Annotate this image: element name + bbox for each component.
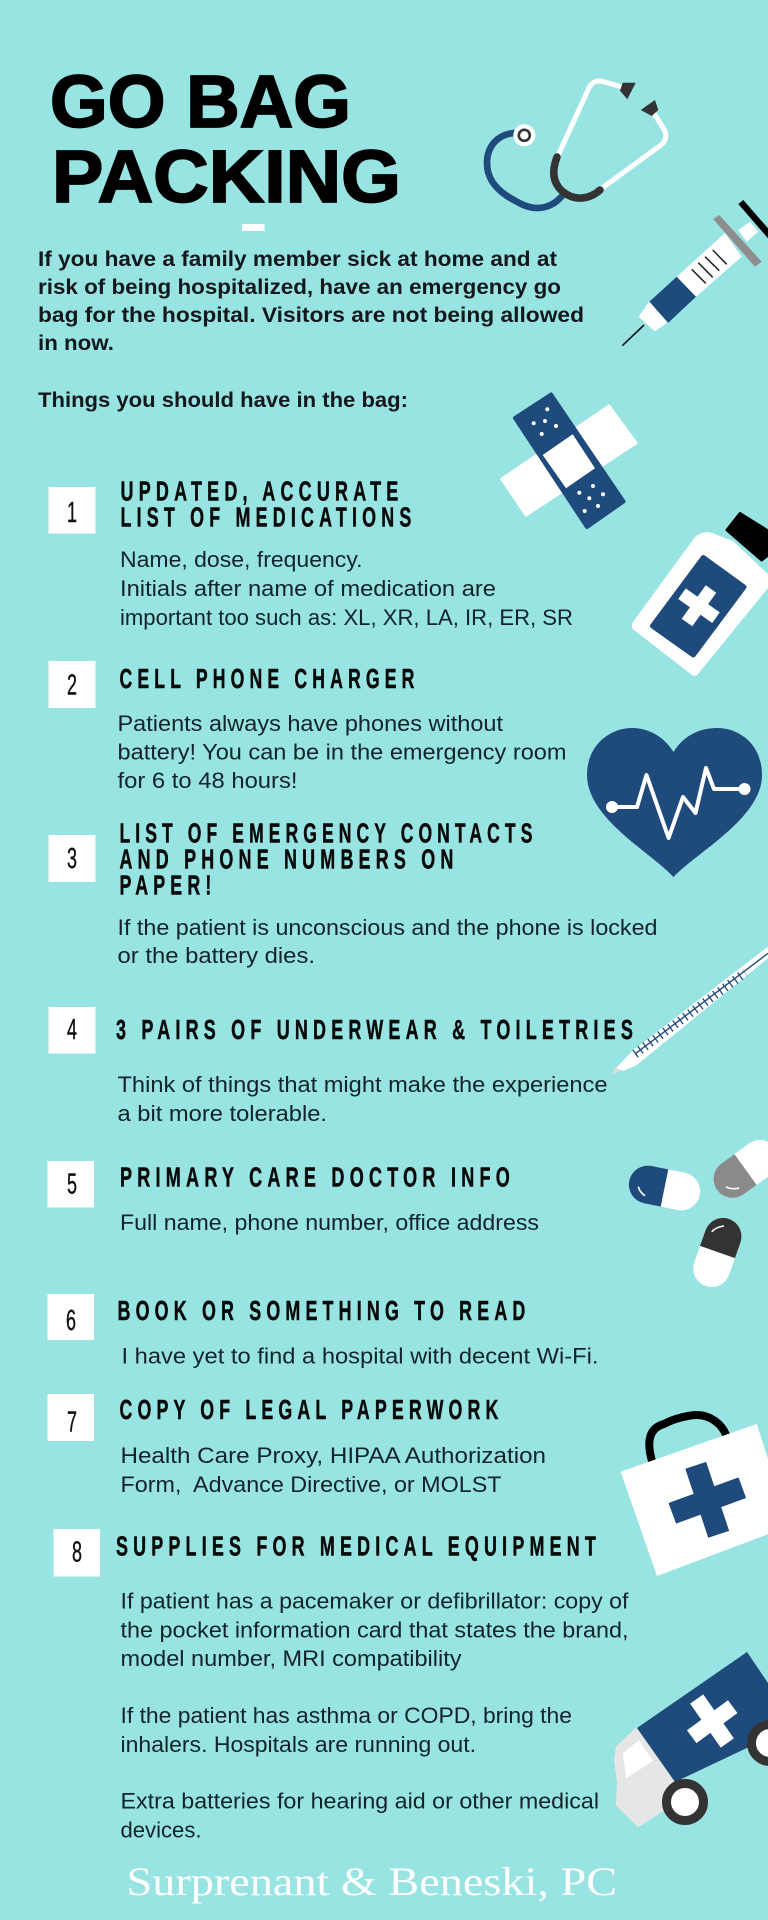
item 3 — [48, 818, 658, 968]
body 3: or the battery dies. — [118, 943, 315, 968]
item 8 — [54, 1529, 629, 1842]
icon: thermometer — [613, 947, 768, 1075]
number box 8: 8 — [72, 1536, 82, 1568]
number box 7: 7 — [67, 1406, 77, 1438]
body 8: the pocket information card that states the brand, — [120, 1618, 628, 1642]
body 8: devices. — [120, 1818, 202, 1842]
number box 4 — [48, 1007, 96, 1054]
heading 3: AND PHONE NUMBERS ON — [120, 844, 458, 874]
icon: medicine bottle — [632, 514, 768, 676]
body 4: Think of things that might make the experience — [118, 1072, 608, 1097]
intro text: If you have a family member sick at home and at — [38, 247, 557, 271]
intro text: bag for the hospital. Visitors are not being allowed — [38, 303, 584, 327]
divider dash — [242, 224, 264, 231]
body 1: Initials after name of medication are — [120, 576, 496, 601]
heading 1 — [120, 476, 416, 533]
icon: ambulance — [615, 1652, 768, 1826]
body 5: Full name, phone number, office address — [120, 1210, 539, 1235]
body 4 — [118, 1072, 608, 1126]
icon: pill dark — [688, 1213, 747, 1292]
body 8: If patient has a pacemaker or defibrillator: copy of — [120, 1588, 629, 1614]
body 6: I have yet to find a hospital with decent Wi-Fi. — [122, 1344, 598, 1368]
number box 3 — [48, 835, 96, 882]
heading 5: PRIMARY CARE DOCTOR INFO — [120, 1162, 515, 1192]
body 7 — [120, 1443, 546, 1497]
title: GO BAG — [50, 60, 351, 143]
body 8: If the patient has asthma or COPD, bring the — [120, 1703, 572, 1728]
body 3: If the patient is unconscious and the phone is locked — [118, 915, 658, 940]
title — [50, 60, 401, 218]
item 7 — [48, 1394, 546, 1497]
footer firm name: Surprenant & Beneski, PC — [126, 1859, 617, 1904]
intro text: risk of being hospitalized, have an emergency go — [38, 275, 561, 299]
body 8: inhalers. Hospitals are running out. — [120, 1732, 476, 1757]
icon: syringe — [622, 200, 768, 346]
icon: heart with pulse — [587, 728, 762, 877]
intro text: Things you should have in the bag: — [38, 388, 408, 412]
icon: pill blue — [625, 1162, 704, 1214]
body 7: Health Care Proxy, HIPAA Authorization — [120, 1443, 546, 1468]
body 7: Form, Advance Directive, or MOLST — [120, 1472, 502, 1497]
body 2: Patients always have phones without — [118, 711, 503, 736]
number box 3: 3 — [67, 843, 77, 875]
body 8 — [120, 1588, 629, 1842]
number box 5: 5 — [67, 1168, 77, 1200]
heading 6: BOOK OR SOMETHING TO READ — [118, 1295, 530, 1326]
body 1: important too such as: XL, XR, LA, IR, ER, SR — [120, 605, 573, 630]
item 5 — [48, 1161, 539, 1235]
number box 5 — [48, 1161, 94, 1208]
title: PACKING — [52, 135, 401, 218]
body 1: Name, dose, frequency. — [120, 547, 362, 572]
body 4: a bit more tolerable. — [118, 1101, 327, 1126]
item 2 — [48, 661, 566, 793]
heading 3: LIST OF EMERGENCY CONTACTS — [120, 818, 538, 848]
heading 1: LIST OF MEDICATIONS — [120, 502, 416, 533]
heading 2: CELL PHONE CHARGER — [120, 663, 420, 694]
item 6 — [48, 1294, 598, 1368]
icon: first aid bag — [621, 1415, 768, 1576]
intro text: in now. — [38, 331, 114, 355]
icon: bandage — [502, 394, 636, 527]
number box 7 — [48, 1394, 94, 1441]
icon: pill gray — [706, 1132, 768, 1205]
number box 6 — [48, 1294, 94, 1340]
item 4 — [48, 1007, 638, 1126]
heading 1: UPDATED, ACCURATE — [120, 476, 404, 506]
heading 3 — [120, 818, 538, 900]
intro text — [38, 247, 584, 412]
body 8: Extra batteries for hearing aid or other medical — [120, 1788, 599, 1814]
icon: stethoscope — [487, 81, 666, 208]
number box 8 — [54, 1529, 100, 1576]
body 1 — [120, 547, 573, 630]
heading 3: PAPER! — [120, 870, 216, 900]
number box 2: 2 — [67, 670, 77, 702]
body 8: model number, MRI compatibility — [120, 1646, 462, 1671]
heading 7: COPY OF LEGAL PAPERWORK — [120, 1394, 504, 1425]
body 3 — [118, 915, 658, 968]
number box 4: 4 — [67, 1014, 77, 1046]
number box 2 — [48, 661, 96, 708]
number box 6: 6 — [66, 1305, 76, 1337]
body 2 — [118, 711, 566, 793]
number box 1: 1 — [67, 497, 77, 529]
number box 1 — [48, 487, 96, 534]
body 2: for 6 to 48 hours! — [118, 768, 298, 793]
item 1 — [48, 476, 573, 630]
body 2: battery! You can be in the emergency room — [118, 740, 566, 764]
